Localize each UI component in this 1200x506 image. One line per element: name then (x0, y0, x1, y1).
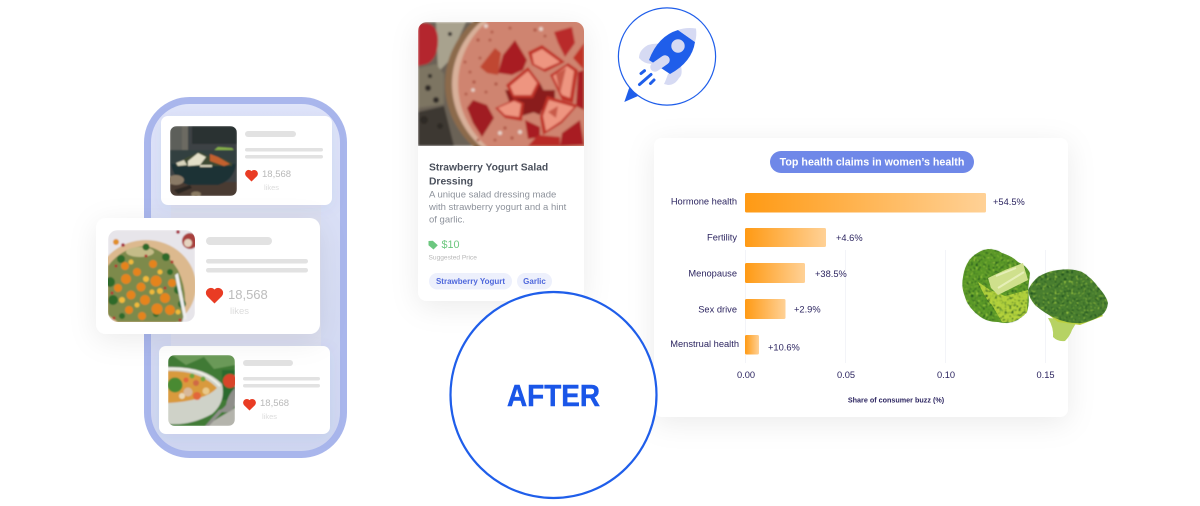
x axis labels: 0.00 (737, 370, 755, 380)
icon: heart (245, 170, 258, 182)
recipe description: A unique salad dressing made (429, 190, 556, 200)
likes count: 18,568 (228, 287, 268, 302)
photo: grain salad (108, 230, 195, 322)
bar: Sex drive: +2.9% (794, 304, 821, 314)
bar: Sex drive: Sex drive (698, 304, 737, 314)
card: bottom recipe (159, 346, 330, 434)
after label: AFTER (507, 378, 600, 413)
bar: Fertility (707, 228, 863, 247)
tag: Strawberry Yogurt: Strawberry Yogurt (436, 277, 505, 286)
likes count: 18,568 (262, 169, 291, 180)
recipe title: Strawberry Yogurt Salad (429, 162, 548, 174)
bar: Fertility: +4.6% (836, 233, 863, 243)
price caption: Suggested Price (428, 254, 477, 262)
recipe title: Dressing (429, 176, 473, 188)
price: $10 (442, 239, 460, 251)
bar: Fertility: Fertility (707, 232, 737, 242)
x axis labels: 0.10 (937, 370, 955, 380)
bar: Menopause (688, 263, 847, 283)
icon: price tag (428, 241, 438, 250)
tag: Garlic: Garlic (523, 277, 546, 286)
bar: Hormone health (671, 193, 1025, 212)
x axis labels (737, 370, 1055, 380)
icon: heart (243, 399, 256, 410)
card: featured recipe (96, 218, 320, 334)
bar: Menopause: Menopause (688, 268, 737, 278)
photo: strawberry dressing (418, 22, 584, 146)
placeholder: title and text lines (245, 131, 323, 158)
panel: chart card (654, 138, 1068, 417)
likes count: likes (264, 183, 279, 192)
bar: Sex drive (698, 299, 821, 319)
x axis labels: 0.15 (1036, 370, 1055, 380)
broccoli floret left (962, 249, 1030, 323)
photo: soup bowl (168, 355, 237, 426)
likes count (228, 287, 268, 317)
bar: Menstrual health (670, 335, 800, 354)
phone frame (148, 100, 344, 454)
icon: heart (206, 288, 223, 304)
chart title pill (770, 151, 974, 173)
panel: phone mockup (148, 100, 344, 454)
bar: Hormone health: Hormone health (671, 196, 737, 206)
recipe description: of garlic. (429, 214, 465, 226)
likes count: 18,568 (260, 398, 289, 409)
x axis title: Share of consumer buzz (%) (848, 396, 945, 404)
bar: Menopause: +38.5% (815, 269, 847, 279)
likes count (260, 398, 289, 421)
bar chart (670, 193, 1025, 354)
image: broccoli (962, 249, 1108, 341)
panel: rocket speech bubble (618, 8, 716, 105)
panel: after badge (450, 292, 656, 498)
likes count: likes (262, 412, 277, 421)
placeholder: title and text lines (206, 237, 308, 272)
recipe description: with strawberry yogurt and a hint (428, 202, 567, 213)
placeholder: title and text lines (243, 360, 320, 388)
broccoli floret right (1028, 269, 1108, 341)
panel: recipe detail card (416, 22, 586, 310)
icon: rocket (639, 28, 696, 85)
likes count: likes (230, 306, 249, 317)
likes count (262, 169, 291, 192)
phone inner column (171, 200, 321, 350)
bar: Menstrual health: +10.6% (768, 342, 800, 352)
bar: Hormone health: +54.5% (993, 197, 1025, 207)
tag: Strawberry Yogurt (429, 273, 512, 290)
tag: Garlic (517, 273, 552, 290)
chart title pill: Top health claims in women’s health (780, 156, 964, 168)
bar: Menstrual health: Menstrual health (670, 339, 739, 349)
x axis labels: 0.05 (837, 370, 855, 380)
card: top recipe (161, 116, 332, 205)
photo: dark bowl (168, 126, 237, 196)
